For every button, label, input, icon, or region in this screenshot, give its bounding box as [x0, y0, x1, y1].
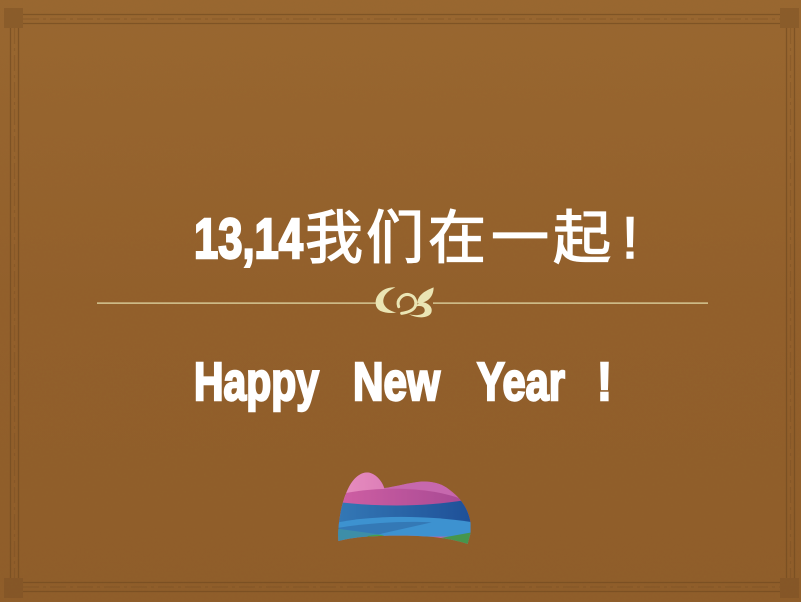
- subtitle: New: [353, 352, 441, 412]
- icon: wave logo: [338, 472, 471, 544]
- divider line: [97, 302, 708, 304]
- title: 我们在一起: [305, 206, 611, 271]
- frame corner: top right: [780, 8, 799, 28]
- subtitle: Happy: [194, 352, 319, 412]
- title: 13,14: [194, 207, 303, 271]
- frame corner: bottom right: [780, 578, 799, 598]
- title: !: [622, 206, 638, 271]
- subtitle: !: [597, 352, 612, 412]
- subtitle: Year: [477, 352, 565, 412]
- frame corner: bottom left: [4, 578, 23, 598]
- title: [194, 206, 638, 271]
- subtitle: [194, 352, 612, 412]
- icon: ornament flourish: [376, 287, 434, 317]
- frame corner: top left: [4, 8, 23, 28]
